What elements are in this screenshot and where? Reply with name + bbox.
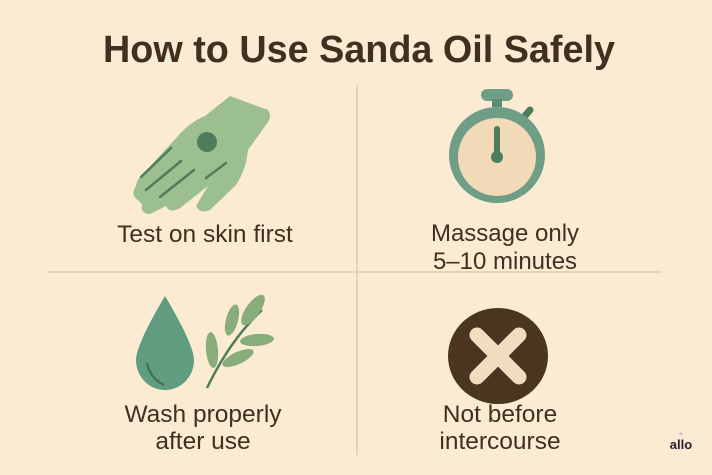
label: massage only: Massage only [431,220,579,247]
icon: water drop [136,296,194,390]
label: not before intercourse: intercourse [439,428,561,455]
logo: allo: + [679,429,684,438]
logo: allo: allo [670,437,692,452]
icon: x circle [448,308,548,404]
label: test on skin first: Test on skin first [117,221,293,248]
label: wash properly: after use [155,428,251,455]
title: How to Use Sanda Oil Safely [103,29,615,71]
icon: hand [133,96,270,214]
label: wash properly: Wash properly [124,401,282,428]
icon: leaf sprig [204,291,274,388]
logo: allo [670,429,692,452]
panel: test on skin [117,96,293,248]
panel: massage [431,89,579,275]
icon: stopwatch [449,89,545,203]
panel: not before intercourse [439,308,561,455]
label: massage only: 5–10 minutes [433,248,577,275]
label: not before intercourse: Not before [443,401,557,428]
panel: wash [124,291,282,455]
